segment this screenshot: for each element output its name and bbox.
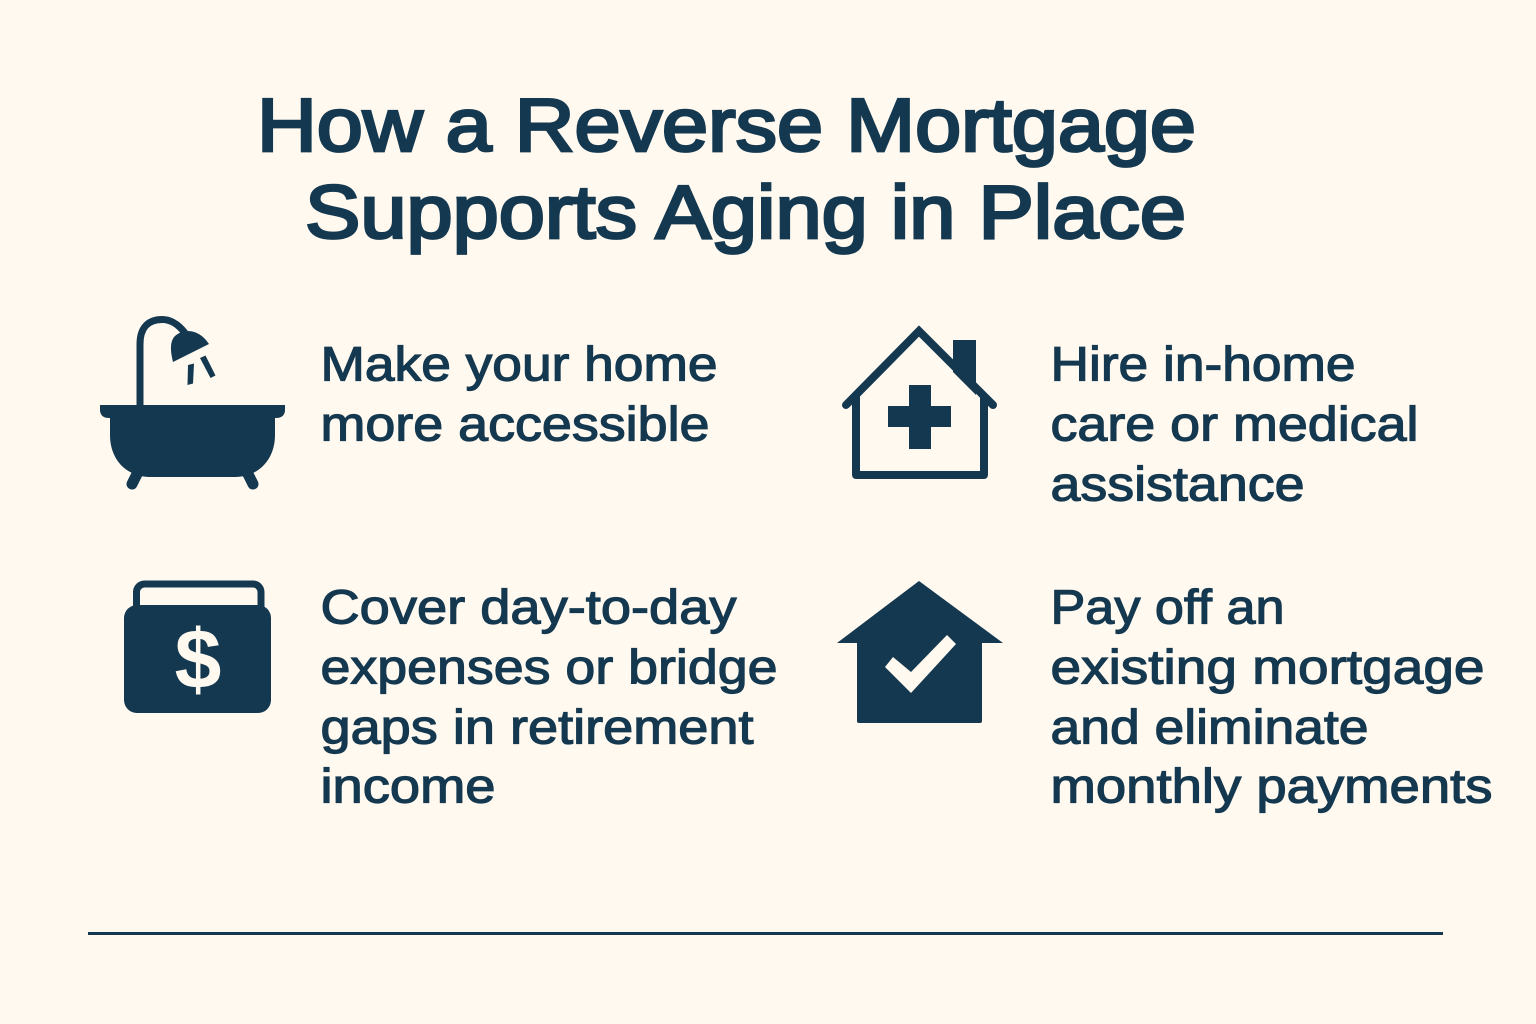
text: pay off existing mortgage	[1050, 582, 1492, 814]
text: make your home more accessible	[320, 338, 718, 452]
text: pay off existing mortgage: existing mortgage	[1050, 642, 1484, 694]
text: cover day-to-day expenses	[320, 582, 778, 814]
panel: day-to-day expenses	[124, 582, 778, 814]
panel: pay off mortgage	[837, 581, 1492, 814]
text: make your home more accessible: more accessible	[320, 398, 710, 452]
title: How a Reverse Mortgage	[257, 83, 1196, 167]
text: hire in-home care: care or medical	[1050, 398, 1418, 452]
icon: wallet with dollar sign: $	[175, 612, 221, 706]
text: make your home more accessible: Make your home	[320, 338, 718, 392]
text: cover day-to-day expenses: expenses or bridge	[320, 642, 778, 694]
panel: in-home care	[846, 331, 1418, 512]
text: hire in-home care: assistance	[1050, 458, 1304, 512]
title: Supports Aging in Place	[305, 170, 1186, 254]
icon: wallet with dollar sign	[124, 584, 271, 713]
icon: house with check mark	[837, 581, 1003, 723]
icon: house with medical cross	[846, 331, 993, 475]
text: pay off existing mortgage: Pay off an	[1050, 582, 1284, 634]
text: cover day-to-day expenses: gaps in retirement	[320, 702, 754, 754]
icon: bathtub with shower	[100, 320, 285, 484]
text: pay off existing mortgage: and eliminate	[1050, 702, 1368, 754]
title	[257, 83, 1196, 254]
text: hire in-home care: Hire in-home	[1050, 338, 1356, 392]
text: cover day-to-day expenses: income	[320, 760, 496, 814]
text: pay off existing mortgage: monthly payments	[1050, 760, 1492, 814]
text: cover day-to-day expenses: Cover day-to-day	[320, 582, 736, 634]
text: hire in-home care	[1050, 338, 1418, 512]
panel: make home accessible	[100, 320, 718, 484]
